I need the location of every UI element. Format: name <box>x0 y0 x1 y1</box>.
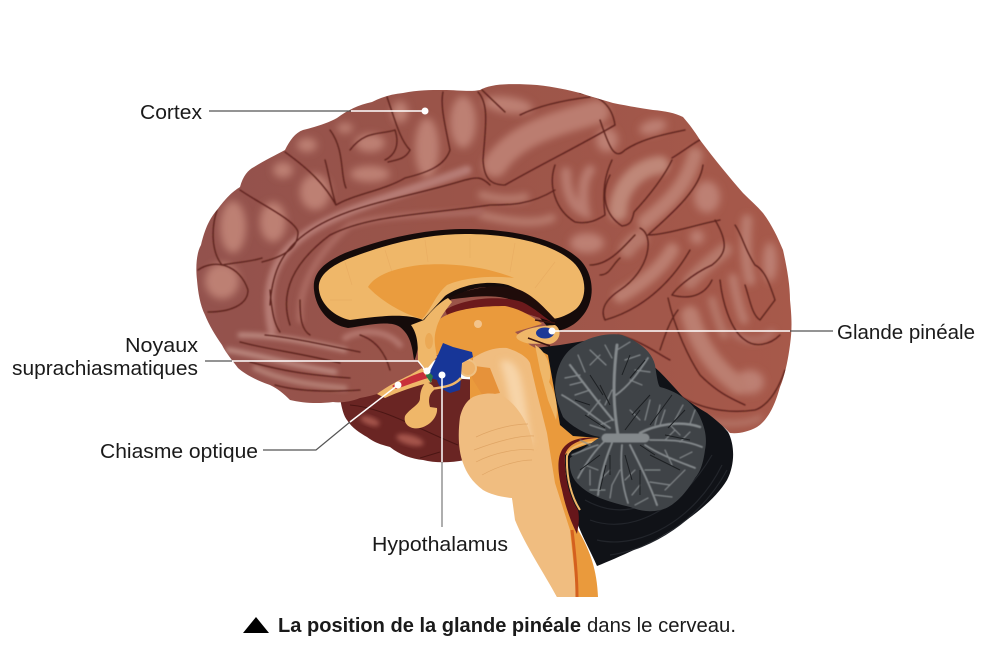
caption: dans le cerveau. <box>587 614 736 637</box>
thalamus and brainstem orange <box>411 298 600 597</box>
label: Chiasme optique <box>100 382 402 463</box>
pineal gland <box>516 320 560 346</box>
caption: La position de la glande pinéale <box>278 614 581 637</box>
gyri highlights <box>205 94 777 394</box>
label: Noyaux suprachiasmatiques: suprachiasmatiques <box>12 357 198 380</box>
cerebral cortex <box>196 84 792 433</box>
corpus callosum with dark border <box>314 229 592 360</box>
label: Noyaux suprachiasmatiques: Noyaux <box>125 334 199 357</box>
sulci <box>198 90 785 411</box>
orange midbrain wedge <box>467 365 500 396</box>
pons bulge <box>459 394 533 498</box>
label: Cortex: Cortex <box>140 101 203 124</box>
icon: triangle <box>243 617 269 633</box>
cerebellum arbor vitae <box>555 334 706 511</box>
inner septum <box>368 264 514 319</box>
large gyrus bands <box>482 112 772 424</box>
label: Glande pinéale <box>548 321 975 344</box>
pons and medulla <box>473 348 577 597</box>
pituitary and optic structures <box>377 368 461 428</box>
midbrain tectum <box>535 345 557 420</box>
label: Cortex <box>140 101 428 124</box>
label: Hypothalamus: Hypothalamus <box>372 533 508 556</box>
hypothalamus <box>427 343 473 393</box>
label: Noyaux suprachiasmatiques <box>12 334 430 380</box>
fornix cream strip <box>411 298 452 370</box>
label: Hypothalamus <box>372 372 508 556</box>
label: Glande pinéale: Glande pinéale <box>837 321 975 344</box>
lower temporal lobe <box>340 375 480 462</box>
fourth ventricle and spinal canal <box>558 438 597 534</box>
caption <box>243 614 736 637</box>
cerebellum outer dark folia <box>535 330 733 566</box>
dark ventricle arc <box>445 286 558 322</box>
label: Chiasme optique: Chiasme optique <box>100 440 258 463</box>
mammillary body <box>460 360 476 376</box>
